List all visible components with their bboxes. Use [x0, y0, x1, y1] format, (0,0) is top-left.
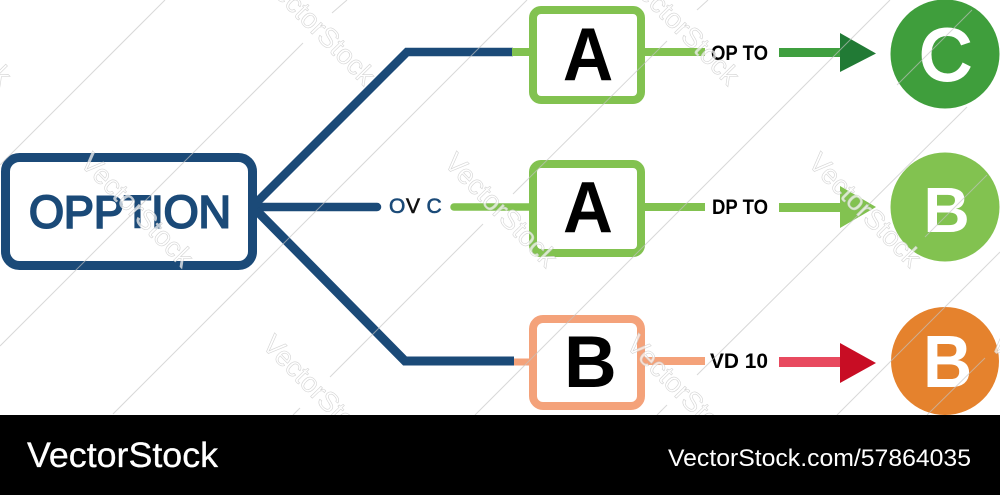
- watermark: VectorStock: [439, 146, 564, 273]
- label: middle connector: C: [426, 195, 442, 218]
- connector: top right: [645, 48, 705, 56]
- label: middle connector: O: [389, 195, 405, 218]
- panel: middle A box: A: [563, 167, 613, 247]
- connector: top left: [512, 48, 532, 56]
- label: middle right connector: DP TO: [712, 196, 768, 219]
- footer image id: VectorStock.com/57864035: [668, 445, 971, 472]
- arrow: top: [779, 33, 876, 72]
- middle row: [454, 152, 1000, 262]
- panel: top A box: [533, 10, 641, 100]
- connector: option to top branch: [256, 52, 513, 203]
- top row: [512, 0, 1000, 108]
- heading: option: OPPTION: [29, 186, 231, 238]
- icon: B circle green: B: [924, 174, 970, 246]
- watermark: VectorStock: [621, 328, 746, 455]
- connector: middle right: [645, 203, 705, 211]
- label: top connector: OP TO: [711, 42, 768, 65]
- label: bottom connector: VD 10: [710, 350, 768, 373]
- icon: C circle: C: [920, 16, 972, 96]
- panel: middle A box: [533, 164, 641, 253]
- panel: top A box: A: [563, 13, 613, 97]
- watermark: VectorStock: [257, 328, 382, 455]
- arrow: bottom: [779, 343, 876, 383]
- connector: middle left: [454, 203, 532, 211]
- connector: option to middle branch: [258, 203, 377, 211]
- icon: B circle green: [890, 152, 1000, 262]
- connector: bottom left: [514, 358, 532, 366]
- watermark: VectorStock: [75, 146, 200, 273]
- connector: bottom right: [645, 357, 705, 365]
- footer bar: [0, 415, 1000, 495]
- watermark: VectorStock: [803, 146, 928, 273]
- icon: B circle orange: B: [923, 321, 972, 404]
- connector: option to bottom branch: [256, 210, 514, 361]
- panel: option box: [6, 158, 252, 266]
- bottom row: [514, 307, 999, 415]
- panel: bottom B box: [533, 319, 641, 406]
- label: middle connector: V: [406, 195, 420, 218]
- icon: B circle orange: [891, 307, 999, 415]
- arrow: middle: [779, 186, 876, 228]
- footer brand: VectorStock: [27, 436, 219, 475]
- panel: bottom B box: B: [564, 322, 617, 403]
- icon: C circle: [890, 0, 1000, 108]
